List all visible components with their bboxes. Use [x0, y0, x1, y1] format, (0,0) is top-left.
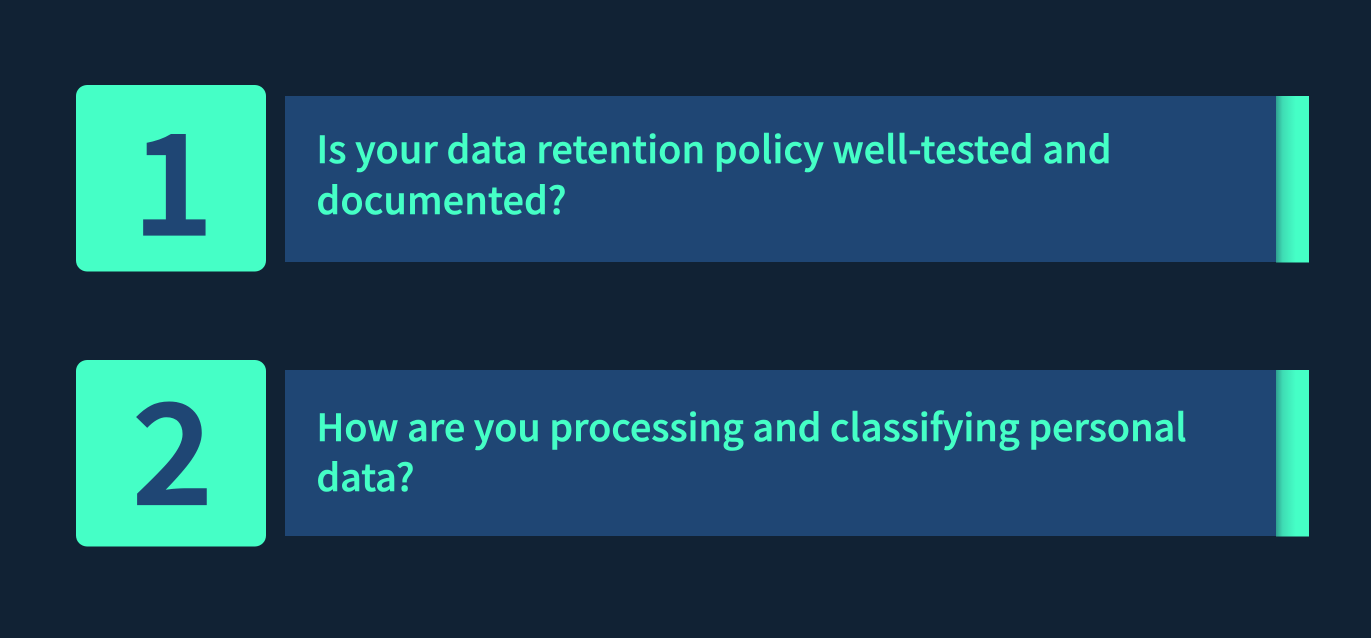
question bar 1: documented?	[316, 170, 566, 225]
question bar 1	[285, 96, 1309, 262]
number badge 2	[76, 340, 266, 546]
panel: question 1	[76, 71, 1309, 277]
number badge 1: 1	[131, 71, 215, 277]
question bar 1: Is your data retention policy well-tested and	[316, 119, 1112, 174]
panel: question 2	[76, 340, 1309, 546]
number badge 1	[76, 71, 266, 277]
number badge 2: 2	[131, 340, 214, 546]
question bar 2: data?	[316, 447, 414, 502]
question bar 2	[285, 370, 1309, 536]
question bar 2: How are you processing and classifying personal	[316, 397, 1186, 452]
